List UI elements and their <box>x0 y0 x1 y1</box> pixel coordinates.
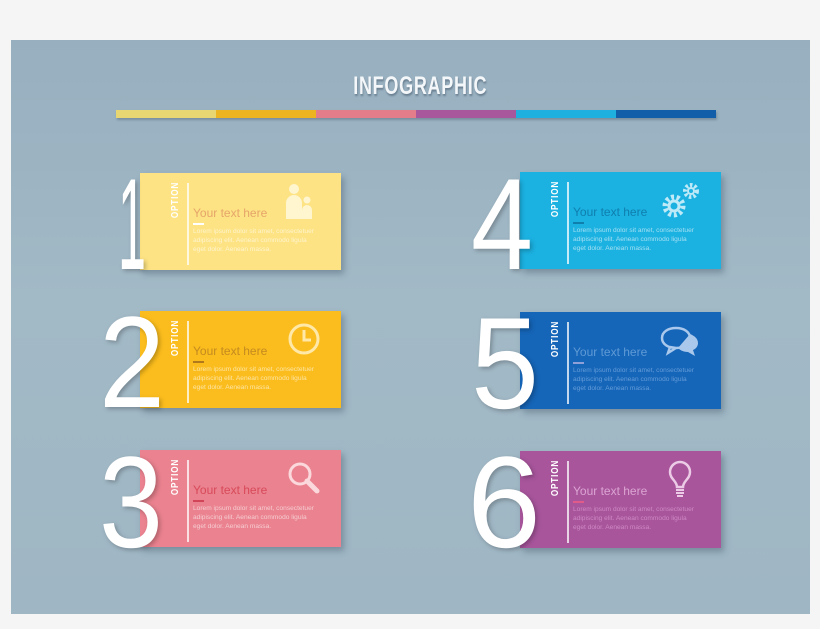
digit 4: 4 <box>471 151 533 297</box>
card 6: adipiscing elit. Aenean commodo ligula <box>573 515 687 522</box>
card 1: OPTION <box>170 182 181 218</box>
card 1: Your text here <box>193 206 267 220</box>
card 5: Your text here <box>573 345 647 359</box>
digit 2: 2 <box>99 289 165 435</box>
card 3: OPTION <box>170 459 181 495</box>
card 5: Lorem ipsum dolor sit amet, consectetuer <box>573 367 694 374</box>
card 5 <box>520 312 721 409</box>
card 5: eget dolor. Aenean massa. <box>573 385 651 392</box>
card 4: Your text here <box>573 205 647 219</box>
card 3: eget dolor. Aenean massa. <box>193 523 271 530</box>
icon: speech bubbles <box>660 326 698 356</box>
card 2: eget dolor. Aenean massa. <box>193 384 271 391</box>
digit 6: 6 <box>467 429 541 575</box>
card 5: OPTION <box>550 321 561 357</box>
card 6: Lorem ipsum dolor sit amet, consectetuer <box>573 506 694 513</box>
card 2: adipiscing elit. Aenean commodo ligula <box>193 375 307 382</box>
card 4: eget dolor. Aenean massa. <box>573 245 651 252</box>
digit 1: 1 <box>118 151 146 297</box>
card 1: eget dolor. Aenean massa. <box>193 246 271 253</box>
color bar <box>116 110 716 118</box>
card 3: Lorem ipsum dolor sit amet, consectetuer <box>193 505 314 512</box>
digit 3: 3 <box>99 429 163 575</box>
digit 5: 5 <box>471 290 539 436</box>
card 2 <box>140 311 341 408</box>
card 5: adipiscing elit. Aenean commodo ligula <box>573 376 687 383</box>
card 6: eget dolor. Aenean massa. <box>573 524 651 531</box>
card 2: Lorem ipsum dolor sit amet, consectetuer <box>193 366 314 373</box>
card 4: OPTION <box>550 181 561 217</box>
card 4 <box>520 172 721 269</box>
card 1: Lorem ipsum dolor sit amet, consectetuer <box>193 228 314 235</box>
card 1 <box>140 173 341 270</box>
card 3 <box>140 450 341 547</box>
card 4: Lorem ipsum dolor sit amet, consectetuer <box>573 227 694 234</box>
card 3: adipiscing elit. Aenean commodo ligula <box>193 514 307 521</box>
icon: people <box>286 184 312 219</box>
title: INFOGRAPHIC <box>353 72 487 100</box>
icon: clock <box>288 324 320 354</box>
card 2: OPTION <box>170 320 181 356</box>
icon: magnifier <box>288 462 320 494</box>
card 1: adipiscing elit. Aenean commodo ligula <box>193 237 307 244</box>
card 4: adipiscing elit. Aenean commodo ligula <box>573 236 687 243</box>
card 6: Your text here <box>573 484 647 498</box>
card 2: Your text here <box>193 344 267 358</box>
card 6 <box>520 451 721 548</box>
icon: light bulb <box>668 460 692 497</box>
icon: gears <box>662 183 699 218</box>
card 3: Your text here <box>193 483 267 497</box>
card 6: OPTION <box>550 460 561 496</box>
